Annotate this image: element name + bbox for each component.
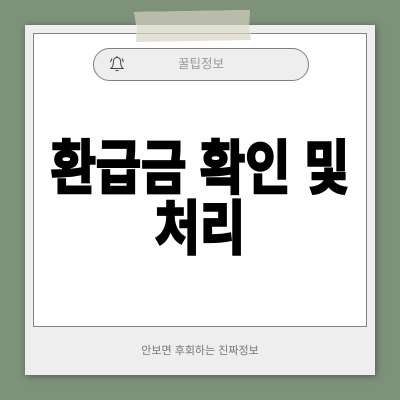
title: 처리 [155, 197, 245, 262]
pill label: 꿀팁정보 [178, 57, 224, 71]
icon: bell [110, 56, 124, 71]
search pill [93, 48, 309, 81]
panel: card [25, 25, 375, 375]
title [51, 137, 349, 262]
footer text: 안보면 후회하는 진짜정보 [141, 345, 259, 357]
panel: inner white frame [33, 33, 367, 327]
icon: masking tape [134, 10, 251, 42]
title: 환급금 확인 및 [51, 137, 349, 202]
